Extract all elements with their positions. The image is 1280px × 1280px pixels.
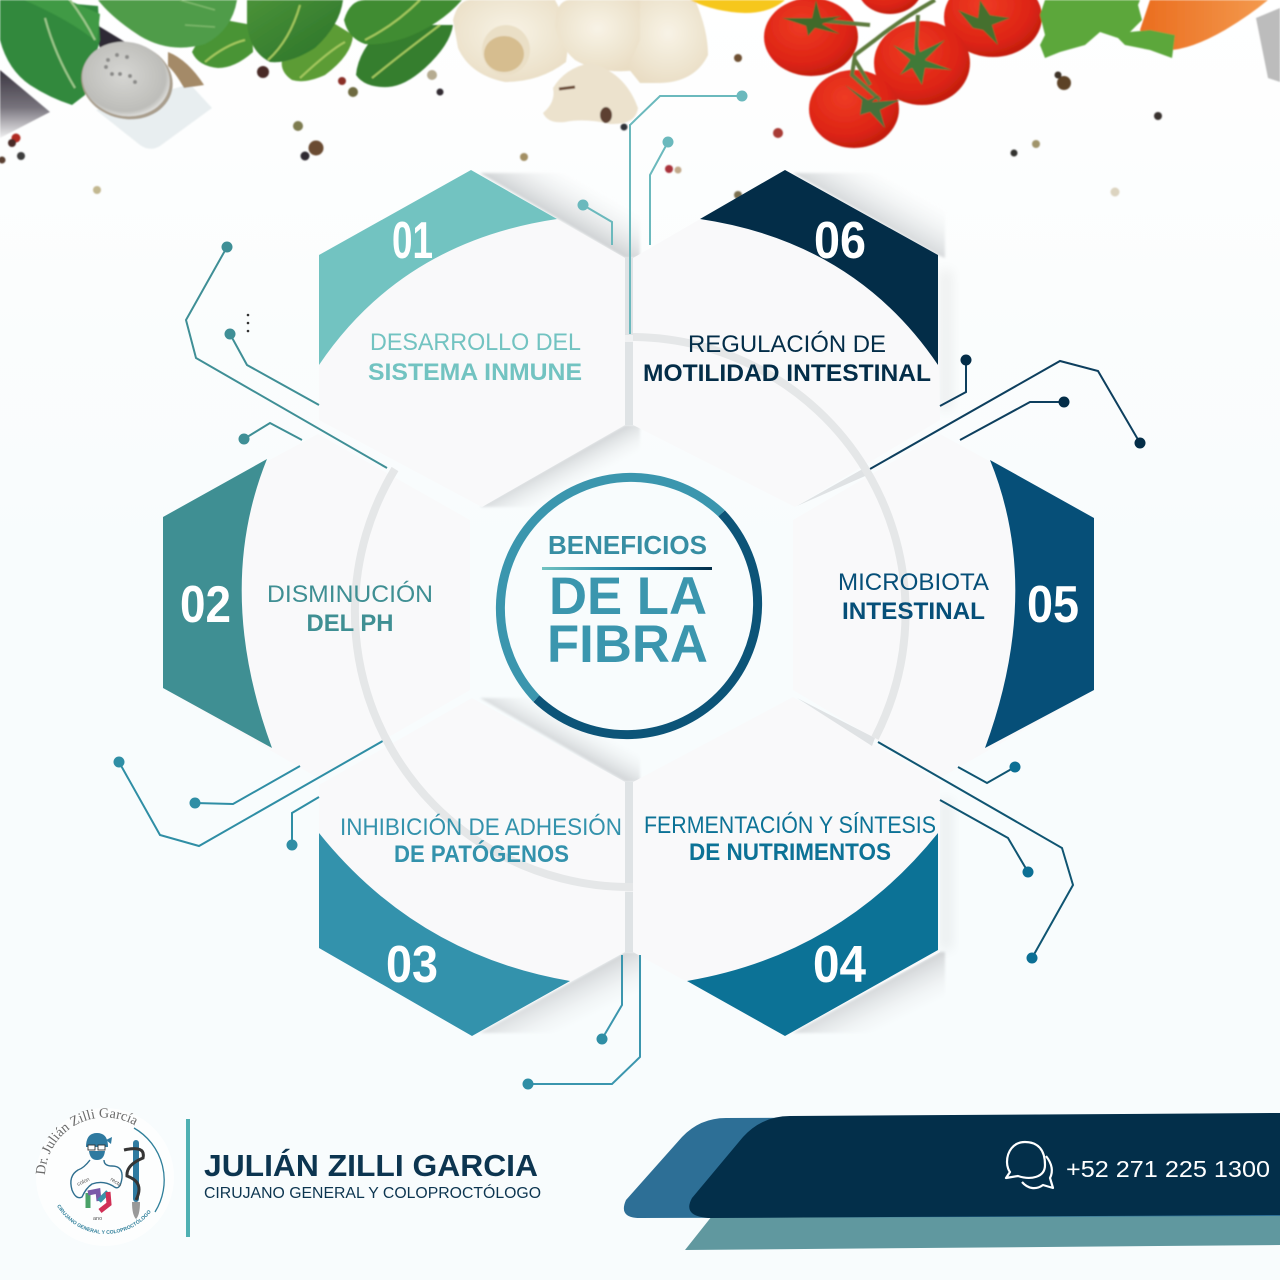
circuit lines: lower right group bbox=[878, 742, 1073, 964]
circuit lines: upper teal group bbox=[578, 90, 748, 334]
circuit lines: left group bbox=[186, 242, 387, 468]
logo badge: ano bbox=[93, 1216, 102, 1222]
intestine bbox=[88, 1191, 109, 1211]
label: regulación de motilidad intestinal: REGULACIÓN DE bbox=[688, 331, 886, 358]
photo: vegetables along the top edge bbox=[0, 0, 1280, 199]
small dots marker bbox=[247, 314, 249, 332]
label: desarrollo del sistema inmune bbox=[368, 329, 582, 386]
circuit lines: bottom group bbox=[522, 955, 640, 1090]
label: regulación de motilidad intestinal: MOTILIDAD INTESTINAL bbox=[643, 360, 931, 387]
label: inhibición de adhesión de patógenos: INHIBICIÓN DE ADHESIÓN bbox=[340, 814, 622, 841]
panel 06: motilidad intestinal: 06 bbox=[814, 212, 866, 270]
label: fermentación y síntesis de nutrimentos: FERMENTACIÓN Y SÍNTESIS bbox=[644, 812, 936, 839]
panel 04: fermentación y nutrimentos bbox=[633, 697, 940, 1036]
doctor name: JULIÁN ZILLI GARCIA bbox=[204, 1148, 538, 1183]
teal arc of badge ring bbox=[500, 477, 722, 699]
logo badge: colon bbox=[76, 1177, 91, 1188]
logo badge bbox=[36, 1108, 165, 1234]
central badge: beneficios de la fibra bbox=[498, 475, 760, 737]
contact banner bbox=[624, 1113, 1280, 1250]
label: inhibición de adhesión de patógenos bbox=[340, 814, 622, 868]
label: microbiota intestinal bbox=[838, 569, 989, 625]
logo badge: CIRUJANO GENERAL Y COLOPROCTÓLOGO bbox=[58, 1204, 150, 1234]
label: disminución del pH: DISMINUCIÓN bbox=[267, 581, 433, 608]
grey strips between right hexagons bbox=[797, 466, 875, 746]
contact banner: +52 271 225 1300 bbox=[1066, 1156, 1270, 1182]
panel 03: adhesión de patógenos bbox=[319, 698, 625, 1036]
panel 04: fermentación y nutrimentos: 04 bbox=[813, 936, 866, 994]
label: microbiota intestinal: MICROBIOTA bbox=[838, 569, 989, 596]
rod of asclepius bbox=[133, 1140, 139, 1202]
panel 01: sistema inmune bbox=[319, 170, 625, 507]
doctor specialty: CIRUJANO GENERAL Y COLOPROCTÓLOGO bbox=[204, 1183, 541, 1202]
panel 05: microbiota intestinal: 05 bbox=[1027, 576, 1079, 634]
label: microbiota intestinal: INTESTINAL bbox=[842, 598, 985, 625]
grey ring arcs bbox=[355, 337, 906, 887]
panel 01: sistema inmune: 01 bbox=[392, 212, 433, 270]
central badge: beneficios de la fibra: DE LA bbox=[549, 567, 707, 626]
panel 05: microbiota intestinal bbox=[793, 434, 1094, 778]
label: desarrollo del sistema inmune: SISTEMA INMUNE bbox=[368, 359, 582, 386]
logo divider bbox=[186, 1119, 190, 1237]
logo badge: recto bbox=[109, 1177, 122, 1189]
dark arc of badge ring bbox=[536, 513, 758, 735]
circuit lines: lower left group bbox=[114, 738, 388, 850]
label: disminución del pH bbox=[267, 581, 433, 637]
doctor figure bbox=[86, 1133, 108, 1147]
label: regulación de motilidad intestinal bbox=[643, 331, 931, 387]
label: inhibición de adhesión de patógenos: DE PATÓGENOS bbox=[394, 840, 569, 868]
panel 06: motilidad intestinal bbox=[633, 170, 940, 507]
label: desarrollo del sistema inmune: DESARROLLO DEL bbox=[370, 329, 581, 356]
panel 02: disminución del pH bbox=[163, 434, 470, 778]
label: disminución del pH: DEL PH bbox=[306, 610, 394, 637]
label: fermentación y síntesis de nutrimentos bbox=[644, 812, 936, 866]
panel 03: adhesión de patógenos: 03 bbox=[386, 936, 438, 994]
circuit lines: right group bbox=[870, 354, 1146, 469]
panel 02: disminución del pH: 02 bbox=[180, 576, 231, 634]
central badge: beneficios de la fibra: BENEFICIOS bbox=[548, 530, 707, 560]
icon: chat bubbles bbox=[1006, 1142, 1053, 1188]
logo badge: Dr. Julián Zilli García bbox=[36, 1108, 137, 1175]
hexagon shadows bbox=[480, 173, 952, 1033]
central badge: beneficios de la fibra: FIBRA bbox=[547, 615, 708, 674]
label: fermentación y síntesis de nutrimentos: DE NUTRIMENTOS bbox=[689, 839, 891, 866]
